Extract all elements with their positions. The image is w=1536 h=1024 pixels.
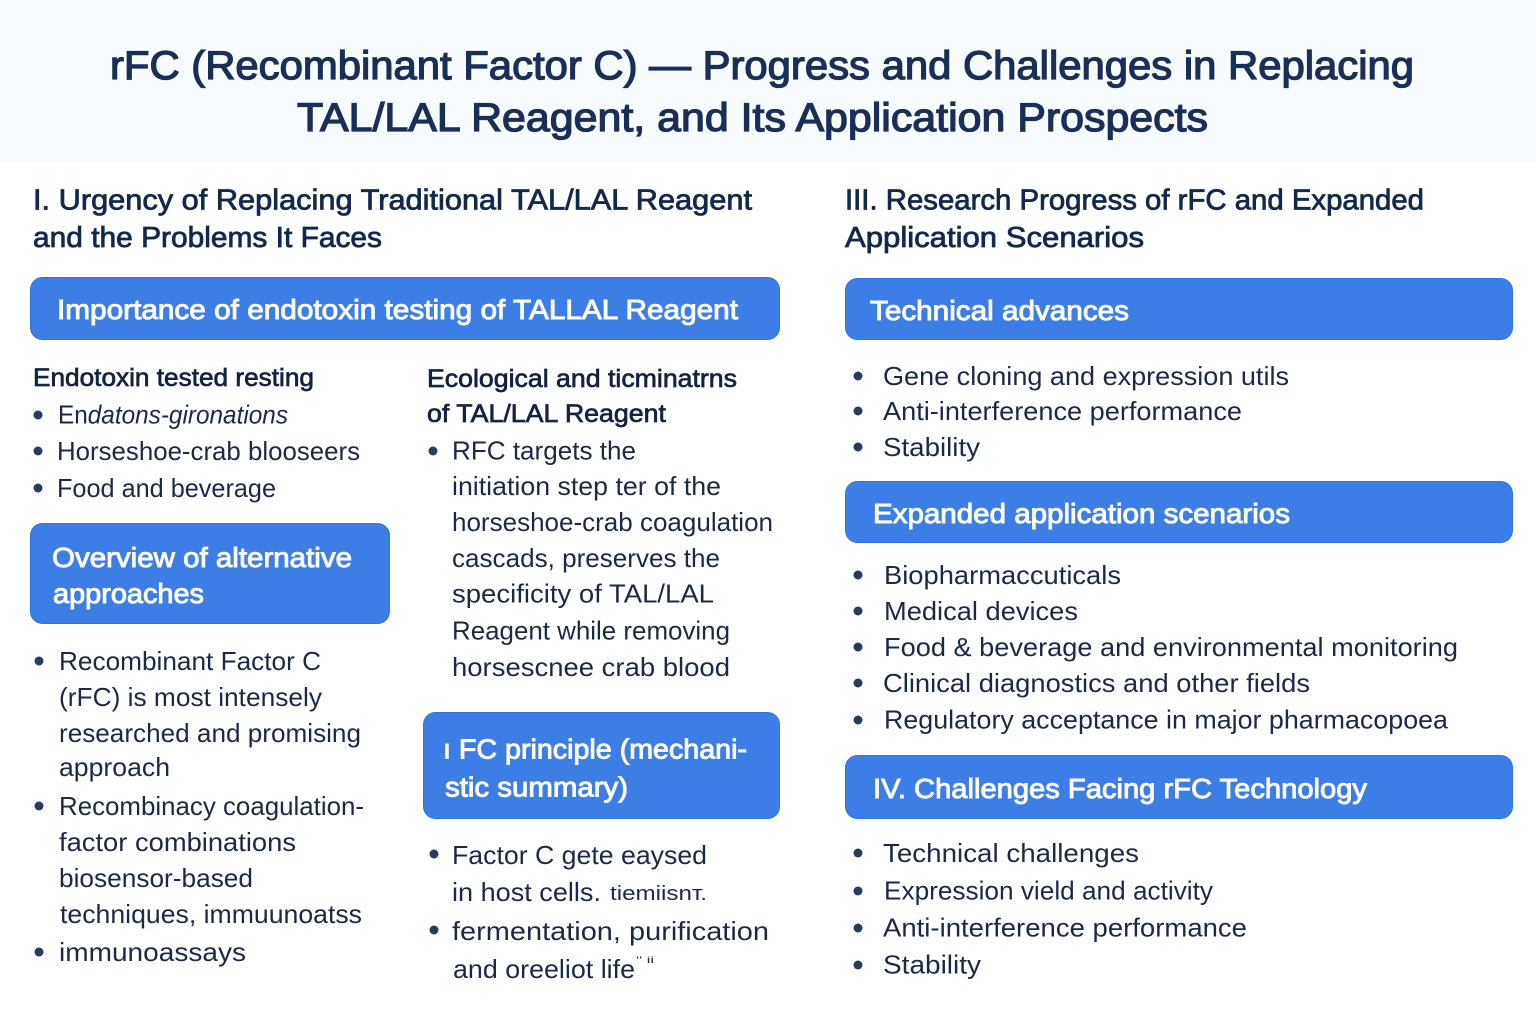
heading: section I	[33, 184, 752, 254]
text block: rFC principle list: '' ii	[636, 955, 654, 965]
text block: endotoxin tested resting	[33, 364, 360, 503]
text block: rFC principle list: Factor C gete eaysed	[452, 840, 707, 870]
text block: endotoxin tested resting: Horseshoe-crab blooseers	[57, 436, 360, 466]
text block: technical advances list: Stability	[883, 432, 980, 462]
text block: application scenarios list: Biopharmaccuticals	[884, 560, 1121, 590]
text block: endotoxin tested resting: Endotoxin tested resting	[33, 364, 314, 392]
heading: section I: I. Urgency of Replacing Traditional TAL/LAL Reagent	[33, 184, 752, 216]
text block: ecological limitations of TAL/LAL reagent: Ecological and ticminatrns	[427, 365, 737, 393]
panel: rFC principle banner: stic summary)	[445, 772, 628, 802]
text block: rFC principle list: and oreeliot life	[453, 954, 635, 984]
text block: application scenarios list	[854, 560, 1458, 734]
text block: challenges list: Expression vield and activity	[884, 876, 1213, 906]
text block: alternative approaches list: researched and promising	[59, 718, 361, 748]
heading: section III: III. Research Progress of rFC and Expanded	[845, 184, 1424, 216]
text block: application scenarios list: Regulatory acceptance in major pharmacopoea	[884, 704, 1449, 734]
text block: rFC principle list	[430, 840, 769, 984]
panel: overview of alternative approaches banner: approaches	[53, 578, 204, 609]
text block: alternative approaches list: factor combinations	[59, 827, 296, 857]
panel: importance of endotoxin testing banner: Importance of endotoxin testing of TALLAL Reagent	[57, 294, 738, 325]
text block: ecological limitations of TAL/LAL reagent: of TAL/LAL Reagent	[427, 400, 666, 428]
panel: technical advances banner: Technical advances	[870, 295, 1129, 326]
text block: challenges list: Technical challenges	[883, 838, 1139, 868]
text block: ecological limitations of TAL/LAL reagent: Reagent while removing	[452, 616, 730, 646]
title	[110, 44, 1414, 140]
panel: expanded application scenarios banner: Expanded application scenarios	[873, 498, 1290, 529]
text block: application scenarios list: Food & beverage and environmental monitoring	[884, 632, 1458, 662]
panel: importance of endotoxin testing banner	[30, 278, 780, 340]
text block: ecological limitations of TAL/LAL reagent: cascads, preserves the	[452, 543, 720, 573]
text block: alternative approaches list: (rFC) is most intensely	[59, 682, 322, 712]
text block: ecological limitations of TAL/LAL reagent: horsescnee crab blood	[452, 652, 730, 682]
text block: alternative approaches list: Recombinant Factor C	[59, 646, 321, 676]
heading: section I: and the Problems It Faces	[33, 222, 382, 254]
text block: endotoxin tested resting: Food and beverage	[57, 473, 276, 503]
text block: technical advances list: Gene cloning and expression utils	[883, 361, 1289, 391]
text block: application scenarios list: Clinical diagnostics and other fields	[883, 668, 1310, 698]
text block: ecological limitations of TAL/LAL reagent	[427, 365, 773, 682]
panel: expanded application scenarios banner	[846, 482, 1512, 542]
text block: rFC principle list: in host cells.	[452, 877, 601, 907]
panel: section IV challenges banner	[846, 756, 1512, 818]
text block: ecological limitations of TAL/LAL reagent: horseshoe-crab coagulation	[452, 507, 773, 537]
title: rFC (Recombinant Factor C) — Progress and Challenges in Replacing	[110, 44, 1414, 88]
text block: alternative approaches list: Recombinacy coagulation-	[59, 791, 364, 821]
text block: challenges list	[854, 838, 1247, 980]
title banner	[0, 0, 1536, 162]
text block: rFC principle list: tiemiisnт.	[610, 883, 707, 905]
text block: ecological limitations of TAL/LAL reagent: RFC targets the	[452, 436, 636, 466]
panel: rFC principle banner	[424, 712, 780, 818]
text block: technical advances list	[854, 361, 1289, 462]
text block: endotoxin tested resting: Endatons-gironations	[58, 400, 288, 430]
panel: overview of alternative approaches banner: Overview of alternative	[52, 542, 352, 573]
heading: section III: Application Scenarios	[845, 222, 1144, 254]
text block: ecological limitations of TAL/LAL reagent: specificity of TAL/LAL	[452, 578, 714, 608]
text block: alternative approaches list: approach	[59, 752, 170, 782]
text block: alternative approaches list: biosensor-based	[59, 863, 253, 893]
text block: rFC principle list: fermentation, purification	[452, 916, 769, 946]
title: TAL/LAL Reagent, and Its Application Prospects	[297, 96, 1208, 140]
panel: section IV challenges banner: IV. Challenges Facing rFC Technology	[873, 773, 1367, 804]
text block: ecological limitations of TAL/LAL reagent: initiation step ter of the	[452, 471, 721, 501]
text block: challenges list: Anti-interference performance	[883, 912, 1247, 942]
text block: alternative approaches list: techniques, immuunoatss	[60, 899, 362, 929]
text block: technical advances list: Anti-interference performance	[883, 396, 1242, 426]
text block: alternative approaches list	[34, 646, 364, 967]
text block: application scenarios list: Medical devices	[884, 596, 1078, 626]
text block: challenges list: Stability	[883, 950, 981, 980]
heading: section III	[845, 184, 1424, 254]
panel: technical advances banner	[846, 278, 1512, 340]
text block: alternative approaches list: immunoassays	[59, 937, 246, 967]
panel: overview of alternative approaches banner	[30, 524, 390, 624]
panel: rFC principle banner: ı FC principle (mechani-	[443, 734, 747, 764]
